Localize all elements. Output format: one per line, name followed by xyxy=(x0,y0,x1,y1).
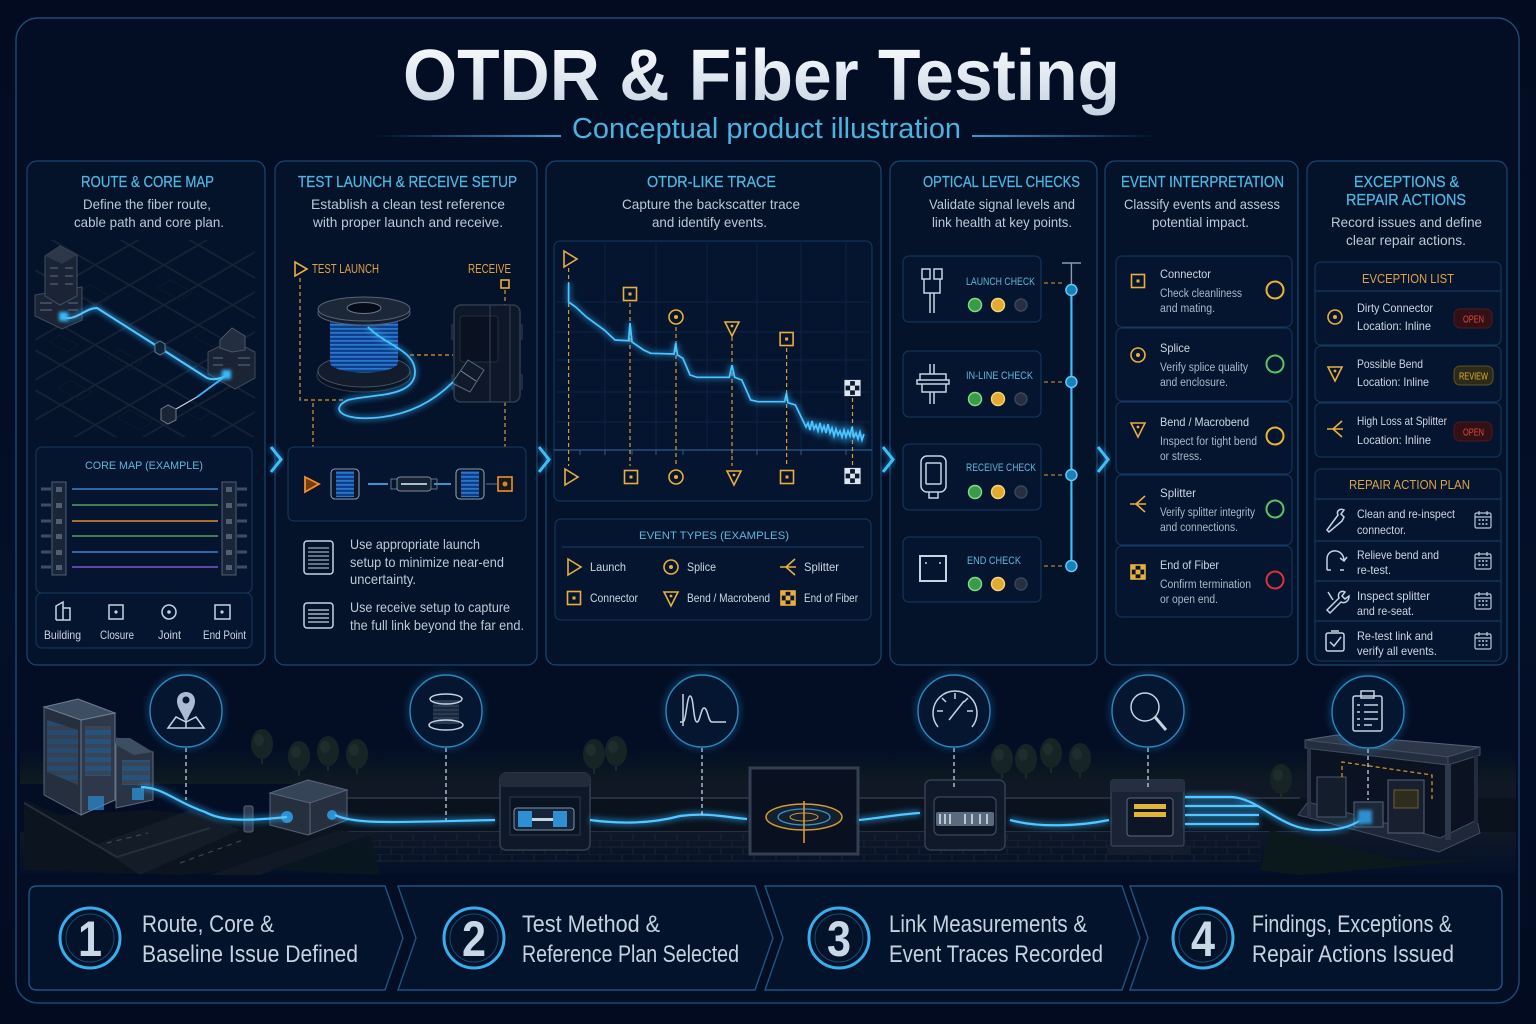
text: receive tip xyxy=(350,599,524,633)
heading: event types: EVENT TYPES (EXAMPLES) xyxy=(639,530,789,542)
icon: inline coupler xyxy=(917,364,949,404)
text: launch tip: setup to minimize near-end xyxy=(350,554,504,570)
status lights xyxy=(968,486,1027,498)
card: bend xyxy=(1116,402,1292,474)
label: receive check: RECEIVE CHECK xyxy=(966,462,1037,474)
step 1 text xyxy=(142,911,358,968)
card: splice: Splice xyxy=(1160,341,1190,355)
panel: otdr trace xyxy=(546,161,881,665)
bubble: meter xyxy=(914,671,994,787)
text: interpretation description: Classify events and assess xyxy=(1124,196,1280,212)
chart: otdr trace xyxy=(554,241,872,501)
row: high loss at splitter: High Loss at Splitter xyxy=(1357,414,1447,428)
bubble: trace xyxy=(662,671,742,817)
illustration: isometric route map xyxy=(34,240,256,437)
illustration: field scene xyxy=(20,671,1516,875)
arrow: panel 4 to 5 xyxy=(1098,447,1108,472)
legend item: splitter xyxy=(780,559,839,575)
left building xyxy=(35,246,82,329)
row: possible bend: Location: Inline xyxy=(1357,375,1429,389)
panel: event interpretation xyxy=(1105,161,1298,665)
icon: receive spool xyxy=(456,469,484,499)
card: splitter: Verify splitter integrity xyxy=(1160,507,1255,519)
text: launch tip xyxy=(350,536,504,587)
number badge 2: 2 xyxy=(462,911,486,967)
junction box xyxy=(244,780,347,835)
bottom event markers xyxy=(565,468,860,485)
diagram: launch to receive chain xyxy=(288,447,526,521)
step 1 text: Route, Core & xyxy=(142,911,274,938)
legend: event types xyxy=(555,519,871,620)
step 1 text: Baseline Issue Defined xyxy=(142,941,358,968)
row: high loss at splitter xyxy=(1315,403,1501,457)
row: clean and re-inspect: Clean and re-inspect xyxy=(1357,507,1456,521)
heading: exception list: EVCEPTION LIST xyxy=(1362,272,1454,286)
step 4 xyxy=(1130,886,1502,990)
fiber lead xyxy=(339,327,453,418)
heading: route and core map: ROUTE & CORE MAP xyxy=(81,174,214,191)
row: possible bend: REVIEW xyxy=(1459,370,1488,382)
bubble: location xyxy=(146,671,226,800)
step 2 text: Test Method & xyxy=(522,911,660,938)
row: high loss at splitter: OPEN xyxy=(1463,426,1484,438)
panel: optical level checks xyxy=(890,161,1097,665)
event guide lines xyxy=(569,268,852,466)
trace line xyxy=(569,283,864,440)
text: launch tip: uncertainty. xyxy=(350,571,416,587)
core lines xyxy=(72,489,218,567)
list: exception list xyxy=(1315,262,1501,457)
label: receive: RECEIVE xyxy=(468,262,511,276)
icon: inline connector xyxy=(368,477,451,491)
bubble: magnifier xyxy=(1108,671,1188,787)
list: repair action plan xyxy=(1315,469,1501,661)
card: in-line check xyxy=(903,351,1041,417)
icon: receive meter xyxy=(921,456,946,498)
status lights xyxy=(968,578,1027,590)
panel: test launch and receive setup xyxy=(275,161,537,665)
legend item: connector xyxy=(568,591,638,605)
in-line enclosure xyxy=(925,780,1005,850)
text: receive tip: Use receive setup to capture xyxy=(350,599,510,615)
text: test setup description xyxy=(311,196,505,230)
icon: launch connector xyxy=(922,269,942,313)
label: test launch xyxy=(295,262,379,276)
card: splitter xyxy=(1116,475,1292,545)
heading: exceptions and repair actions xyxy=(1346,174,1466,209)
text: exceptions description xyxy=(1331,214,1482,248)
subtitle: Conceptual product illustration xyxy=(572,113,961,145)
icon: building xyxy=(56,602,70,620)
ground layers xyxy=(20,748,1516,875)
row: inspect splitter xyxy=(1327,589,1491,618)
card: splice xyxy=(1116,328,1292,401)
legend item: splitter: Splitter xyxy=(804,560,839,574)
text: test setup description: with proper launch and receive. xyxy=(312,214,503,230)
icon: end point xyxy=(215,605,230,619)
card: end of fiber: End of Fiber xyxy=(1160,558,1219,572)
heading: exceptions and repair actions: REPAIR ACTIONS xyxy=(1346,192,1466,209)
icon: closure xyxy=(109,605,123,619)
tip: receive setup xyxy=(304,599,524,633)
label: receive xyxy=(468,262,511,288)
text: launch tip: Use appropriate launch xyxy=(350,536,480,552)
bubble: fiber spool xyxy=(406,671,486,820)
text: optical description: Validate signal levels and xyxy=(929,196,1075,212)
step 3 text xyxy=(889,911,1103,968)
arrow: panel 1 to 2 xyxy=(271,447,281,472)
row: relieve bend: re-test. xyxy=(1357,563,1391,577)
icon: joint xyxy=(162,605,176,619)
status lights xyxy=(968,298,1027,312)
illustration: test instrument case xyxy=(452,305,522,402)
row: dirty connector: Location: Inline xyxy=(1357,319,1431,333)
splice box xyxy=(750,768,858,854)
equipment shelter xyxy=(1298,735,1480,852)
step 2 text: Reference Plan Selected xyxy=(522,941,739,968)
card: launch check xyxy=(903,256,1041,322)
closure enclosure xyxy=(500,773,590,850)
card: connector: and mating. xyxy=(1160,303,1215,315)
row: re-test link: verify all events. xyxy=(1357,644,1437,658)
row: clean and re-inspect xyxy=(1327,507,1491,537)
step 3 text: Event Traces Recorded xyxy=(889,941,1103,968)
card: splice: Verify splice quality xyxy=(1160,362,1248,374)
label: launch check: LAUNCH CHECK xyxy=(966,276,1036,288)
icon: end terminal xyxy=(920,556,946,581)
splitter cabinet xyxy=(1107,780,1191,855)
text: optical description xyxy=(929,196,1075,230)
step 2 xyxy=(398,886,773,990)
number badge 2 xyxy=(444,908,504,968)
icon: receive unit xyxy=(304,603,333,628)
row: inspect splitter: and re-seat. xyxy=(1357,604,1414,618)
legend item: launch xyxy=(568,559,626,575)
chart: core map example xyxy=(36,447,252,593)
step 3 xyxy=(765,886,1140,990)
row: clean and re-inspect: connector. xyxy=(1357,523,1406,537)
card: connector: Check cleanliness xyxy=(1160,288,1242,300)
step 4 text: Findings, Exceptions & xyxy=(1252,911,1452,938)
tip: launch setup xyxy=(304,536,504,587)
text: trace description: Capture the backscatter trace xyxy=(622,196,800,212)
text: route description xyxy=(74,196,224,230)
illustration: fiber spool xyxy=(317,297,411,392)
step 3 text: Link Measurements & xyxy=(889,911,1087,938)
icon: launch spool xyxy=(331,469,359,499)
dashed connection guides xyxy=(300,278,505,447)
heading: optical level checks: OPTICAL LEVEL CHECKS xyxy=(923,174,1080,191)
card: end of fiber: Confirm termination xyxy=(1160,579,1251,591)
rail: measurement bus xyxy=(1044,263,1081,572)
legend item: bend xyxy=(664,591,770,606)
end point cube xyxy=(161,405,176,424)
card: connector: Connector xyxy=(1160,267,1211,281)
card: end of fiber: or open end. xyxy=(1160,594,1218,606)
legend item: splice: Splice xyxy=(687,560,716,574)
text: interpretation description: potential impact. xyxy=(1152,214,1249,230)
row: inspect splitter: Inspect splitter xyxy=(1357,589,1430,603)
text: trace description: and identify events. xyxy=(652,214,767,230)
step 2 text xyxy=(522,911,739,968)
label: joint: Joint xyxy=(158,628,182,642)
text: optical description: link health at key points. xyxy=(932,214,1072,230)
number badge 3 xyxy=(809,908,869,968)
heading: event interpretation: EVENT INTERPRETATION xyxy=(1121,174,1284,191)
card: end check xyxy=(903,537,1041,602)
trees xyxy=(251,729,1292,799)
label: end check: END CHECK xyxy=(967,555,1022,567)
panel: exceptions and repair actions xyxy=(1307,161,1507,665)
label: building: Building xyxy=(44,628,81,642)
text: receive tip: the full link beyond the far end. xyxy=(350,617,524,633)
bubble: clipboard xyxy=(1328,672,1408,800)
card: splitter: Splitter xyxy=(1160,486,1196,500)
panel: route and core map xyxy=(27,150,265,665)
legend item: splice xyxy=(664,560,716,574)
arrow: panel 3 to 4 xyxy=(883,447,893,472)
title: OTDR & Fiber Testing xyxy=(403,36,1120,116)
arrow: panel 2 to 3 xyxy=(539,447,549,472)
heading: test launch: TEST LAUNCH & RECEIVE SETUP xyxy=(298,174,517,191)
icon: launch marker xyxy=(305,477,319,492)
buildings xyxy=(44,699,153,815)
left patch module xyxy=(41,482,66,575)
row: possible bend xyxy=(1315,346,1501,402)
label: closure: Closure xyxy=(100,628,134,642)
row: dirty connector: OPEN xyxy=(1463,314,1484,326)
legend item: connector: Connector xyxy=(590,591,638,605)
right building xyxy=(208,328,255,389)
card: splice: and enclosure. xyxy=(1160,377,1228,389)
card: bend: Inspect for tight bend xyxy=(1160,436,1257,448)
legend item: end of fiber xyxy=(781,591,858,605)
row: re-test link xyxy=(1326,629,1491,658)
step 4 text xyxy=(1252,911,1454,968)
status lights xyxy=(968,392,1027,406)
card: end of fiber xyxy=(1116,546,1292,617)
row: relieve bend xyxy=(1327,548,1491,577)
number badge 1: 1 xyxy=(78,911,102,967)
card: connector xyxy=(1116,256,1292,327)
icon: receive marker xyxy=(486,477,512,491)
legend item: end of fiber: End of Fiber xyxy=(804,591,858,605)
right patch module xyxy=(222,482,247,575)
number badge 4: 4 xyxy=(1191,911,1215,967)
label: test launch: TEST LAUNCH xyxy=(312,262,379,276)
text: exceptions description: Record issues and define xyxy=(1331,214,1482,230)
text: exceptions description: clear repair actions. xyxy=(1346,232,1466,248)
row: possible bend: Possible Bend xyxy=(1357,357,1423,371)
heading: repair action plan: REPAIR ACTION PLAN xyxy=(1349,478,1470,492)
number badge 3: 3 xyxy=(827,911,851,967)
card: bend: or stress. xyxy=(1160,451,1202,463)
legend item: launch: Launch xyxy=(590,560,626,574)
card: splitter: and connections. xyxy=(1160,522,1238,534)
legend: map symbols xyxy=(36,593,252,648)
text: trace description xyxy=(622,196,800,230)
heading: otdr trace: OTDR-LIKE TRACE xyxy=(647,174,776,191)
step 1 xyxy=(29,886,403,990)
number badge 4 xyxy=(1173,908,1233,968)
joint marker xyxy=(155,341,165,355)
row: re-test link: Re-test link and xyxy=(1357,629,1433,643)
text: route description: Define the fiber route, xyxy=(83,196,211,212)
glowing fiber route xyxy=(141,787,1372,830)
label: in-line check: IN-LINE CHECK xyxy=(966,370,1034,382)
heading: exceptions and repair actions: EXCEPTIONS & xyxy=(1354,174,1459,191)
card: bend: Bend / Macrobend xyxy=(1160,415,1249,429)
fiber route xyxy=(59,308,231,409)
number badge 1 xyxy=(60,908,120,968)
row: dirty connector: Dirty Connector xyxy=(1357,301,1433,315)
row: dirty connector xyxy=(1328,301,1492,333)
row: relieve bend: Relieve bend and xyxy=(1357,548,1439,562)
top event markers xyxy=(564,251,860,396)
step 4 text: Repair Actions Issued xyxy=(1252,941,1454,968)
row: high loss at splitter: Location: Inline xyxy=(1357,433,1431,447)
heading: core map: CORE MAP (EXAMPLE) xyxy=(85,460,203,472)
label: end point: End Point xyxy=(203,628,247,642)
legend item: bend: Bend / Macrobend xyxy=(687,591,770,605)
card: receive check xyxy=(903,444,1041,510)
icon: fiber coil xyxy=(304,541,333,574)
text: test setup description: Establish a clean test reference xyxy=(311,196,505,212)
text: interpretation description xyxy=(1124,196,1280,230)
text: route description: cable path and core plan. xyxy=(74,214,224,230)
